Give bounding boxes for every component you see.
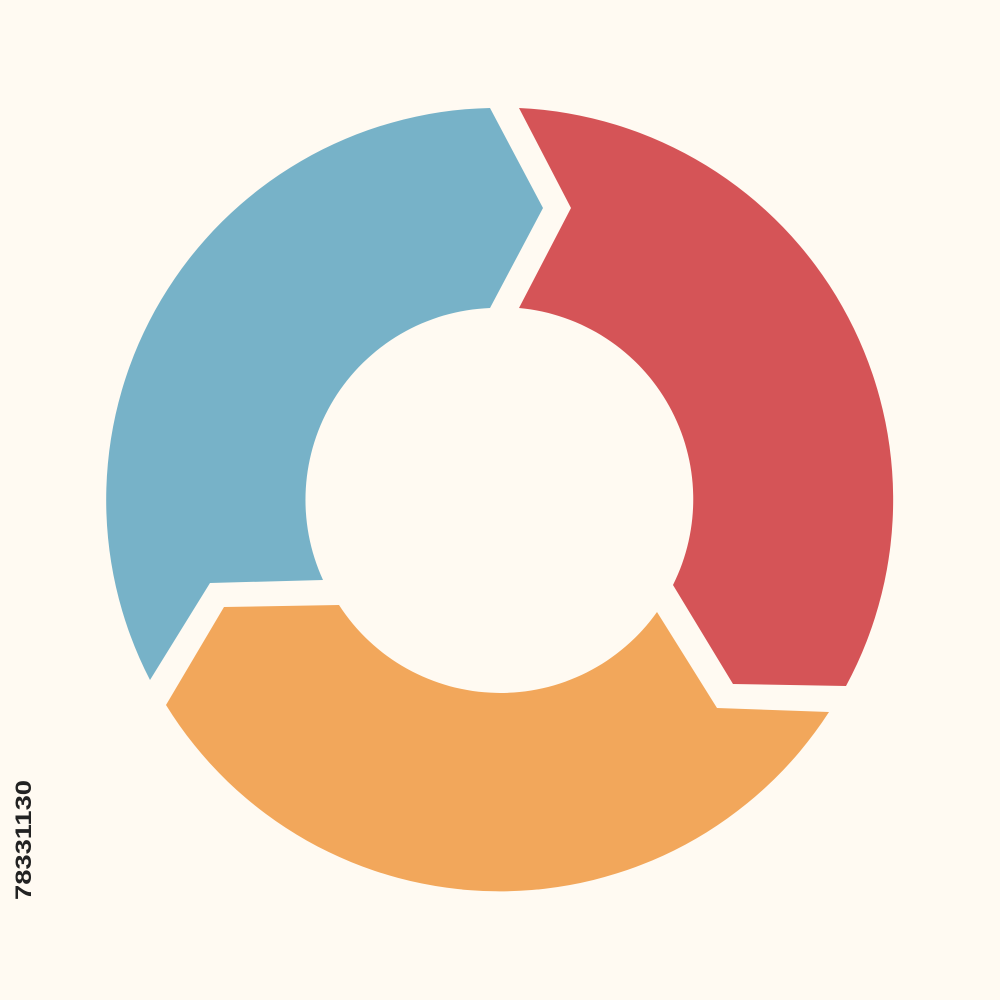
segment: orange arrow (166, 605, 829, 891)
stock id text: 78331130 (11, 780, 36, 900)
segment: red arrow (519, 108, 893, 686)
segment: blue arrow (106, 108, 543, 680)
